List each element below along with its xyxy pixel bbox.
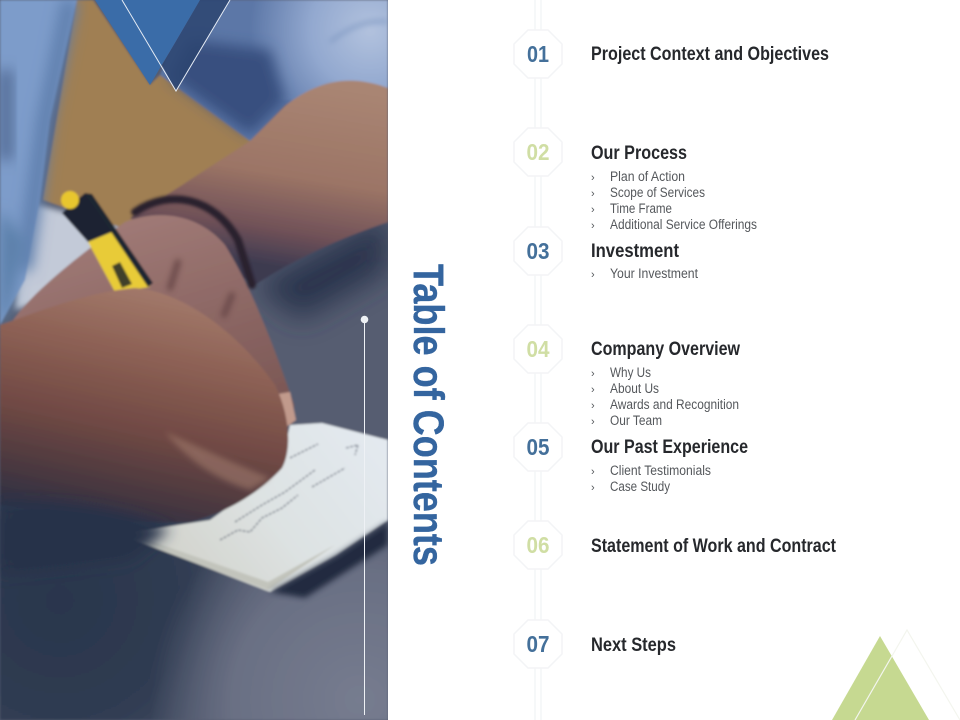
item 06: 06 [526,532,550,558]
photo: hand writing on a note with a yellow marker [0,0,388,720]
item 03: 03 [526,238,550,264]
item 07: 07 [526,631,550,657]
item 02: › [591,188,595,200]
handwriting on the note [220,444,358,540]
item 05: Client Testimonials [610,463,711,478]
item 01: 01 [527,41,549,67]
item 04: Why Us [610,365,651,380]
item 03 [514,227,698,281]
item 04 [514,325,740,428]
blue triangle accent [95,0,200,85]
item 05: › [591,482,595,494]
white outline triangle [122,0,230,91]
item 03: › [591,269,595,281]
item 04: › [591,416,595,428]
item 07: Next Steps [591,635,676,656]
arm shadow [255,215,388,320]
item 04: Company Overview [591,339,740,360]
item 04: About Us [610,381,659,396]
item 06: Statement of Work and Contract [591,536,837,557]
item 02: 02 [526,139,550,165]
bracelet [135,199,252,285]
navy translucent triangle accent [162,0,230,91]
item 05: Our Past Experience [591,437,748,458]
item 04: › [591,400,595,412]
item 02: › [591,172,595,184]
item 02: Our Process [591,143,687,164]
item 05: 05 [526,434,550,460]
note paper [120,423,388,592]
item 04: 04 [526,336,550,362]
item 02: › [591,220,595,232]
item 01 [514,30,829,78]
item 04: Our Team [610,413,662,428]
item 03: Investment [591,241,680,262]
item 06 [514,521,837,569]
item 04: Awards and Recognition [610,397,739,412]
item 07 [514,620,676,668]
item 02: Additional Service Offerings [610,217,757,232]
item 04: › [591,384,595,396]
item 04: › [591,368,595,380]
item 01: Project Context and Objectives [591,44,829,65]
item 05: › [591,466,595,478]
title: Table of Contents [404,264,452,566]
item 03: Your Investment [610,266,698,281]
item 02: › [591,204,595,216]
marker pen [61,191,153,292]
timeline spine [535,0,541,720]
item 02 [514,128,757,232]
item 05: Case Study [610,479,670,494]
item 02: Plan of Action [610,169,685,184]
item 05 [514,423,748,494]
item 02: Time Frame [610,201,672,216]
item 02: Scope of Services [610,185,705,200]
white vertical line with dot [361,316,368,715]
green triangle accent [832,630,960,720]
